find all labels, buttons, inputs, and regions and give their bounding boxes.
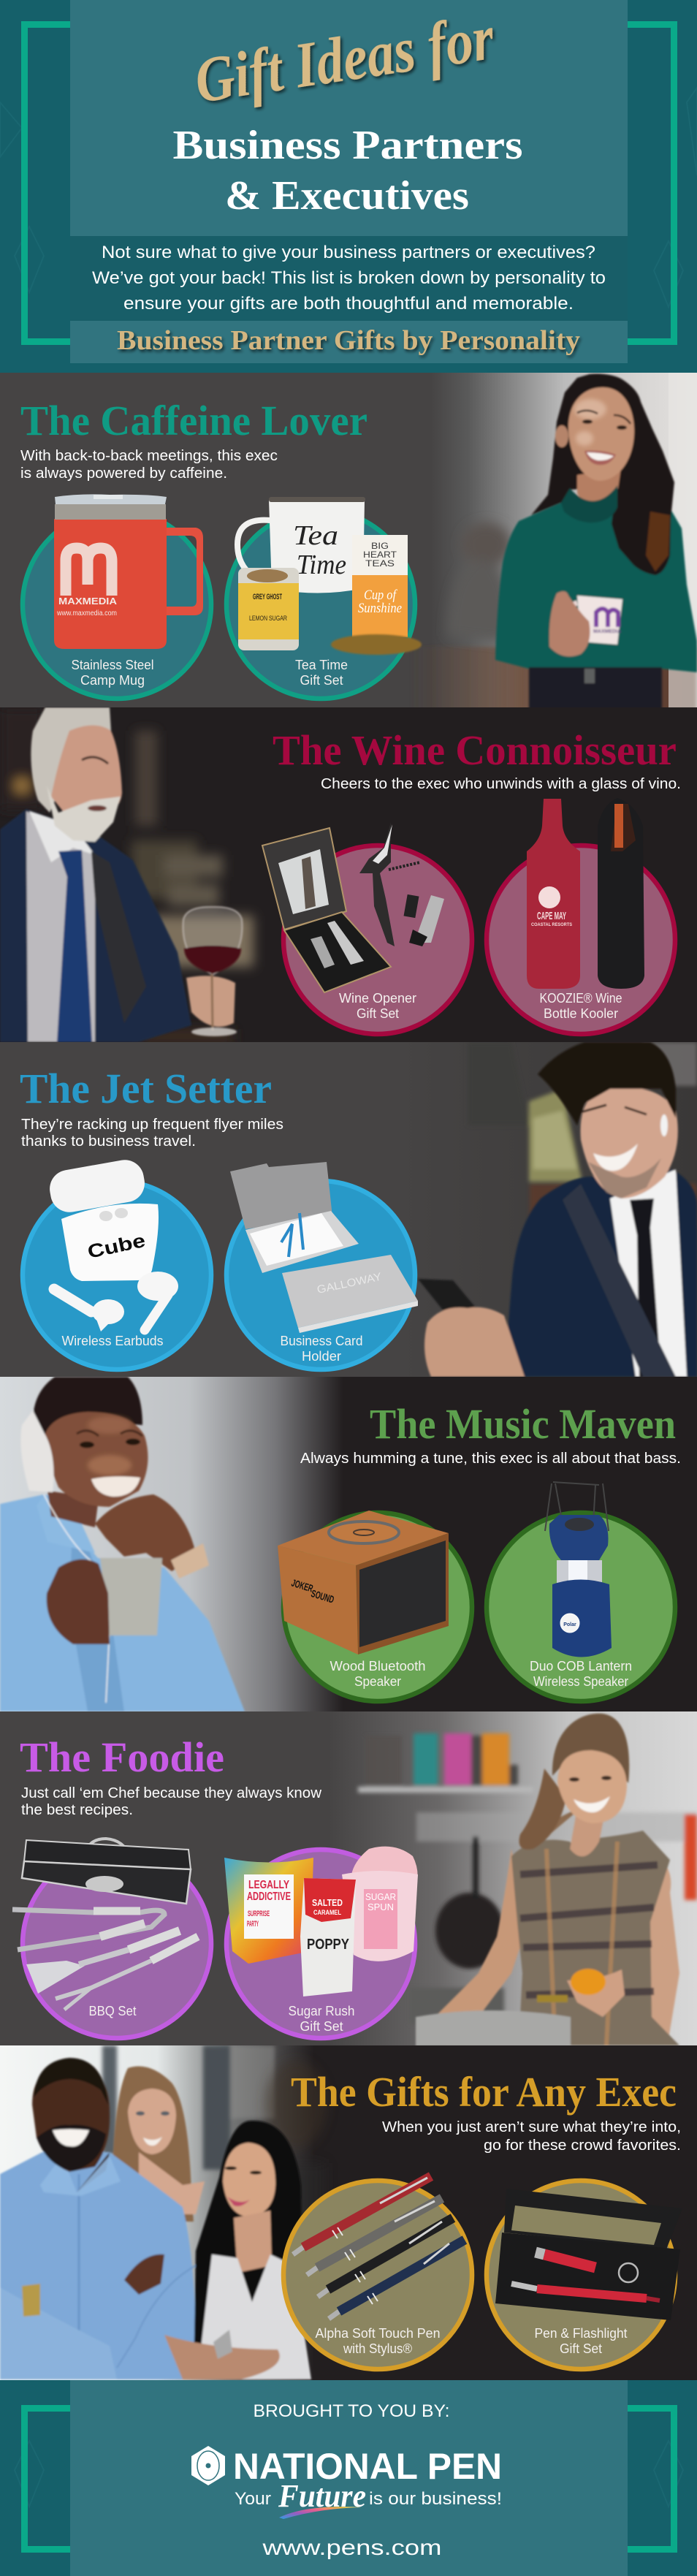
gift: wireless earbuds [23, 1157, 211, 1369]
gift: tea time gift set [226, 497, 422, 699]
icon: red mug: MAXMEDIA [58, 596, 118, 607]
photo: group of executives [0, 2045, 327, 2380]
icon: tea set: Tea [293, 520, 338, 551]
icon: card holders [230, 1162, 418, 1333]
photo: woman with mug [435, 373, 697, 707]
photo: woman cooking [329, 1711, 697, 2046]
gift: alpha soft touch pen with stylus [283, 2176, 472, 2369]
photo: man with phone [395, 1042, 697, 1377]
panel: the music maven [0, 1377, 697, 1711]
gift: bbq set [12, 1839, 211, 2038]
wordmark: NATIONAL PEN [233, 2446, 502, 2487]
gift: business card holder [226, 1162, 418, 1369]
icon: tea set: BIG [371, 541, 389, 551]
icon: tea set: Time [297, 550, 346, 580]
caption: Holder [302, 1349, 341, 1364]
gift: duo cob lantern wireless speaker [487, 1482, 675, 1701]
caption: Bottle Kooler [544, 1006, 618, 1021]
icon: tea set: Sunshine [358, 601, 402, 616]
icon: gift box [495, 2189, 682, 2320]
description: Cheers to the exec who unwinds with a glass of vino. [321, 776, 681, 792]
rainbow swoosh [279, 2507, 362, 2519]
icon: snacks: SUGAR [365, 1891, 396, 1902]
icon: tea set [237, 497, 422, 655]
intro text: Not sure what to give your business partners or executives? [102, 243, 595, 262]
icon: snacks: PARTY [247, 1920, 259, 1929]
gift: wine opener gift set [262, 822, 472, 1034]
main title: Business Partners [172, 123, 523, 168]
caption: Wireless Speaker [533, 1674, 628, 1689]
website: www.pens.com [262, 2536, 441, 2560]
caption: KOOZIE® Wine [539, 991, 622, 1006]
photo: woman with mug: MAXMEDIA [593, 629, 621, 634]
icon: tea set: Cup of [364, 588, 397, 603]
description: thanks to business travel. [21, 1133, 196, 1150]
description [21, 1117, 283, 1150]
caption: Speaker [354, 1674, 401, 1689]
caption: Wireless Earbuds [61, 1334, 164, 1348]
caption: BBQ Set [89, 2004, 136, 2018]
icon: bbq tools [12, 1839, 198, 2010]
icon: wine koozies: COASTAL RESORTS [531, 923, 572, 927]
caption: Pen & Flashlight [535, 2326, 627, 2341]
gift: koozie wine bottle kooler [487, 798, 675, 1034]
icon: red mug: www.maxmedia.com [56, 609, 117, 618]
caption [339, 991, 416, 1021]
description: go for these crowd favorites. [484, 2138, 681, 2154]
caption [316, 2326, 440, 2356]
icon: wood speaker: SOUND [310, 1587, 335, 1606]
panel: the wine connoisseur [0, 707, 697, 1044]
caption: Gift Set [560, 2341, 602, 2356]
heading: The Caffeine Lover [20, 397, 367, 444]
panel: the jet setter [0, 1042, 697, 1377]
gift: wood bluetooth speaker [278, 1511, 472, 1701]
header panel [0, 0, 697, 373]
caption: Sugar Rush [288, 2004, 355, 2018]
icon: lantern: Polar [563, 1622, 576, 1627]
icon: snacks: SALTED [312, 1897, 343, 1908]
icon: earbuds case [47, 1157, 178, 1331]
icon: tea set: GREY GHOST [253, 593, 282, 601]
caption [295, 658, 348, 688]
panel: the caffeine lover [0, 373, 697, 713]
icon: snacks: CARAMEL [313, 1909, 341, 1916]
icon: snacks: SPUN [367, 1901, 394, 1912]
tagline: Future [278, 2478, 366, 2514]
photo: man with wine glass [0, 707, 254, 1044]
description [20, 448, 278, 482]
heading: The Music Maven [370, 1400, 676, 1448]
intro text: We’ve got your back! This list is broken down by personality to [92, 268, 606, 288]
icon: wine koozies [527, 798, 644, 989]
icon: tea set: TEAS [365, 558, 395, 569]
caption [330, 1659, 425, 1689]
icon: wood speaker: JOKER [290, 1577, 314, 1595]
icon: red mug [54, 494, 203, 649]
icon: lantern [545, 1482, 612, 1657]
intro text: ensure your gifts are both thoughtful and memorable. [123, 294, 574, 314]
tagline: Your [235, 2489, 271, 2509]
caption [539, 991, 622, 1021]
caption: Gift Set [357, 1006, 399, 1021]
caption [530, 1659, 632, 1689]
icon: earbuds case: Cube [85, 1229, 147, 1263]
description: is always powered by caffeine. [20, 466, 227, 482]
icon: tea set: LEMON SUGAR [249, 615, 287, 622]
main title: & Executives [225, 173, 469, 219]
caption: Gift Set [300, 673, 343, 688]
description [382, 2119, 681, 2154]
description: When you just aren’t sure what they’re into, [382, 2119, 681, 2135]
heading: The Jet Setter [20, 1065, 272, 1112]
description: the best recipes. [21, 1802, 133, 1818]
caption: Business Card [281, 1334, 362, 1348]
icon: snacks: POPPY [307, 1937, 350, 1953]
caption: Camp Mug [80, 673, 145, 688]
heading: The Wine Connoisseur [273, 726, 677, 774]
gift: sugar rush gift set [224, 1847, 418, 2038]
brought to you by: BROUGHT TO YOU BY: [253, 2401, 450, 2421]
caption: Duo COB Lantern [530, 1659, 632, 1673]
description: They’re racking up frequent flyer miles [21, 1117, 283, 1133]
icon: snacks [224, 1847, 418, 1996]
description: With back-to-back meetings, this exec [20, 448, 278, 464]
caption [288, 2004, 355, 2034]
photo: woman with headphones [0, 1377, 343, 1711]
caption [281, 1334, 362, 1364]
caption: Alpha Soft Touch Pen [316, 2326, 440, 2341]
icon: wine opener box [262, 822, 444, 992]
gift: stainless steel camp mug [23, 494, 211, 699]
icon: snacks: LEGALLY [248, 1879, 289, 1891]
section heading: Business Partner Gifts by Personality [117, 325, 580, 356]
description: Just call ‘em Chef because they always know [21, 1785, 322, 1801]
gift: pen and flashlight gift set [487, 2181, 682, 2369]
caption: Gift Set [300, 2019, 343, 2034]
icon: wine koozies: CAPE MAY [537, 910, 566, 922]
tagline [235, 2478, 502, 2514]
intro text [92, 243, 606, 314]
icon: snacks: SURPRISE [248, 1910, 270, 1918]
icon: wood speaker [278, 1511, 449, 1654]
icon: card holders: GALLOWAY [316, 1271, 383, 1296]
logo: national pen [191, 2446, 502, 2519]
caption [72, 658, 153, 688]
icon: pens [293, 2176, 465, 2319]
description [21, 1785, 322, 1818]
main title [172, 123, 523, 219]
icon: tea set: HEART [363, 550, 397, 560]
icon: snacks: ADDICTIVE [247, 1891, 291, 1903]
caption [535, 2326, 627, 2356]
caption: Wood Bluetooth [330, 1659, 425, 1673]
caption: Stainless Steel [72, 658, 153, 672]
caption: with Stylus® [343, 2341, 412, 2356]
heading: The Gifts for Any Exec [291, 2068, 677, 2116]
panel: the foodie [0, 1711, 697, 2046]
caption: Tea Time [295, 658, 348, 672]
icon: pen nib hexagon [191, 2446, 225, 2485]
panel: the gifts for any exec [0, 2045, 697, 2380]
tagline: is our business! [369, 2489, 502, 2509]
caption: Wine Opener [339, 991, 416, 1006]
heading: The Foodie [20, 1733, 224, 1781]
description: Always humming a tune, this exec is all about that bass. [300, 1451, 681, 1467]
panel: footer [0, 2380, 697, 2576]
